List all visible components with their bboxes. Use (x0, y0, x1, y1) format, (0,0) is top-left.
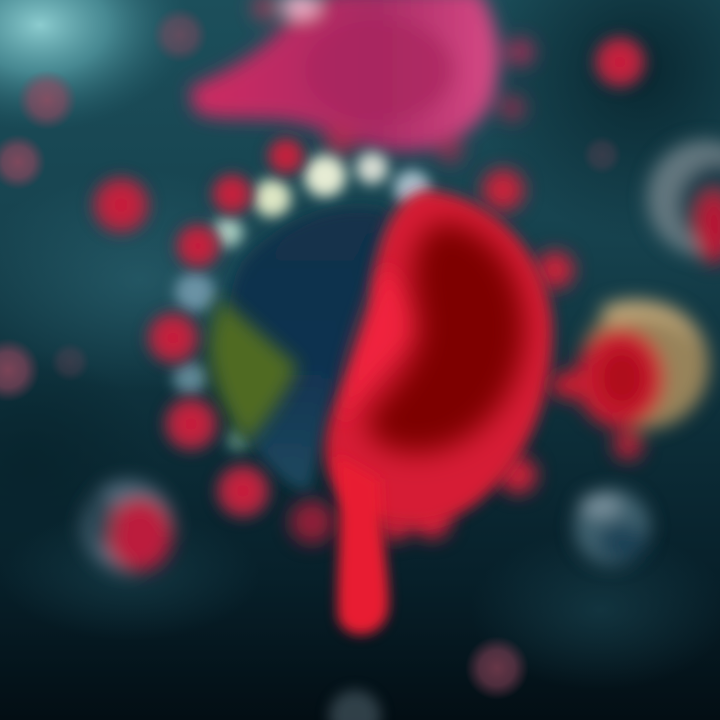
tan ring cell (550, 300, 709, 460)
pink cell at top (190, 0, 535, 164)
red kidney cell (290, 169, 574, 635)
navy half sphere (227, 208, 390, 492)
inner dark pit (369, 222, 524, 452)
small red spheres (89, 33, 649, 521)
bright fold highlight (342, 265, 413, 425)
right edge sphere (647, 140, 720, 264)
grey sphere lower right (574, 489, 650, 565)
red drip (336, 455, 389, 635)
olive diamond (209, 298, 298, 444)
bottom left sphere (82, 480, 174, 572)
cell spikes (290, 169, 574, 544)
white bead arc (173, 152, 430, 452)
